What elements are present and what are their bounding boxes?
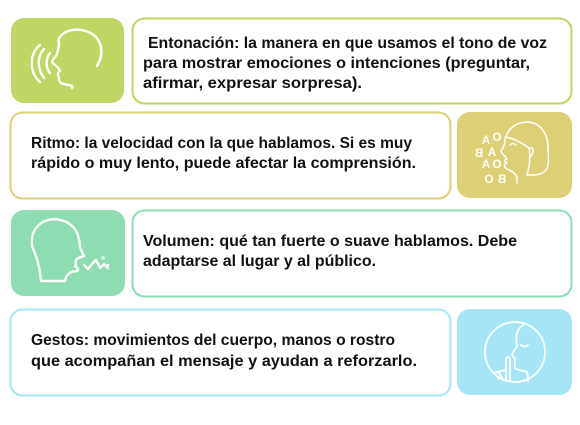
icon letters [475, 132, 506, 186]
panel: ritmo icon [457, 112, 572, 198]
panel: ritmo text: Ritmo: la velocidad con la que hablamos. Si es muy [31, 135, 412, 152]
panel: volumen text [132, 210, 572, 296]
panel: volumen text: adaptarse al lugar y al público. [143, 253, 376, 270]
panel: volumen icon [11, 210, 125, 296]
icon letters: O [493, 159, 502, 171]
panel: entonación text: Entonación: la manera en que usamos el tono de voz [148, 35, 547, 52]
icon: head with voice wave [32, 219, 108, 281]
icon letters: B [475, 148, 483, 160]
icon: speaking head with sound waves [32, 30, 101, 88]
icon letters: B [498, 174, 506, 186]
panel: entonación icon [11, 18, 124, 103]
panel: entonación text [132, 18, 572, 104]
panel: entonación text: afirmar, expresar sorpresa). [143, 75, 362, 92]
icon letters: O [485, 174, 494, 186]
panel: gestos text [10, 310, 450, 396]
panel: gestos text: Gestos: movimientos del cuerpo, manos o rostro [31, 332, 395, 349]
panel: gestos text: que acompañan el mensaje y ayudan a reforzarlo. [31, 353, 417, 370]
icon letters: O [493, 132, 502, 144]
icon: face with finger on lips [485, 322, 545, 382]
panel: entonación text: para mostrar emociones o intenciones (preguntar, [143, 55, 530, 72]
icon letters: A [488, 147, 496, 159]
panel: volumen text: Volumen: qué tan fuerte o suave hablamos. Debe [143, 233, 517, 250]
icon: woman profile with letters [501, 122, 548, 183]
panel: ritmo text [10, 112, 450, 198]
panel: ritmo text: rápido o muy lento, puede afectar la comprensión. [31, 155, 416, 172]
icon letters: A [482, 135, 490, 147]
panel: gestos icon [457, 309, 572, 395]
icon letters: A [482, 159, 490, 171]
